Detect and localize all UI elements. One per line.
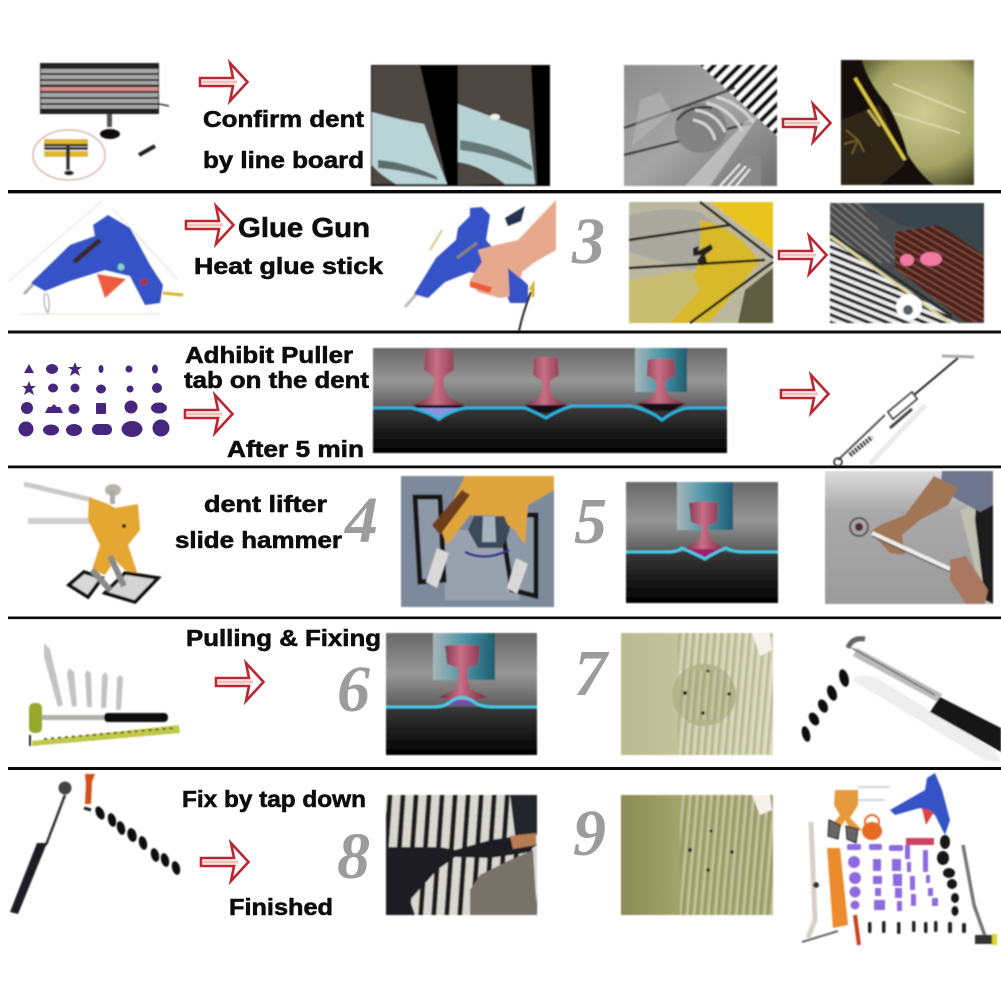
text: after 5 min: After 5 min (227, 436, 364, 462)
chart: dent cross-section with three pullers (373, 348, 727, 453)
text: glue gun heat glue stick (194, 212, 383, 279)
number 3: 3 (571, 205, 605, 278)
text: adhibit puller tab on the dent: Adhibit Puller (185, 342, 353, 368)
text: finished: Finished (229, 894, 333, 920)
text: confirm dent by line board (203, 106, 364, 173)
photo: glue tab on yellow car panel (629, 202, 773, 323)
number 9: 9 (573, 797, 606, 870)
chart: cross-section pulled out (386, 633, 537, 755)
panel: step 1 confirm dent (33, 60, 974, 186)
photo: hands using slide hammer (825, 471, 993, 604)
text: glue gun heat glue stick: Heat glue stick (194, 253, 383, 279)
arrow (201, 843, 248, 881)
panel: step 6 fix by tap down and finished (10, 773, 997, 945)
photo: finished panel (621, 795, 773, 915)
arrow (781, 375, 828, 413)
icon: blue glue gun (8, 201, 183, 314)
photo: pink glue tabs over stripes (830, 203, 984, 323)
arrow (779, 236, 826, 274)
photo: dent lifter on panel (401, 476, 554, 607)
text: dent lifter slide hammer (175, 491, 342, 553)
icon: purple glue tabs (18, 362, 170, 437)
arrow (186, 206, 234, 244)
panel: step 3 adhibit puller tab (18, 342, 974, 466)
icon: complete tool kit (802, 773, 997, 945)
arrow (216, 663, 264, 701)
icon: tap-down hammer with tips (800, 639, 1001, 762)
text: dent lifter slide hammer: slide hammer (175, 527, 342, 553)
chart: cross-section lifting (626, 482, 778, 603)
text: pulling and fixing: Pulling & Fixing (186, 625, 381, 651)
text: adhibit puller tab on the dent (184, 342, 369, 393)
icon: yellow dent lifter (24, 484, 158, 602)
icon: slide hammer (834, 356, 974, 466)
photo: dent under reflection (371, 65, 550, 186)
text: fix by tap down: Fix by tap down (182, 786, 366, 812)
text: glue gun heat glue stick: Glue Gun (238, 212, 370, 243)
icon: line board with stand (33, 63, 169, 180)
icon: hammer and tap-down tips (10, 774, 182, 914)
photo: board reflected on grey door (624, 65, 777, 186)
number 4: 4 (343, 484, 378, 557)
arrow (783, 104, 830, 142)
row dividers (8, 190, 1001, 770)
photo: panel with dots (621, 633, 773, 755)
number 6: 6 (337, 653, 370, 726)
text: adhibit puller tab on the dent: tab on the dent (184, 367, 369, 393)
number 5: 5 (574, 485, 607, 558)
panel: step 2 glue gun (8, 200, 984, 331)
number 7: 7 (574, 637, 610, 710)
photo: hand holding glue gun (405, 200, 556, 331)
text: confirm dent by line board: Confirm dent (203, 106, 364, 132)
photo: tap down over stripes (386, 795, 537, 915)
text: confirm dent by line board: by line board (203, 147, 364, 173)
arrow (200, 63, 248, 101)
number 8: 8 (337, 820, 370, 893)
panel: step 5 pulling and fixing (29, 625, 1001, 762)
text: dent lifter slide hammer: dent lifter (204, 491, 327, 517)
arrow (185, 395, 232, 433)
photo: yellow dent view (841, 60, 974, 185)
icon: tap-down pens, hammer and tape (29, 643, 180, 746)
panel: step 4 dent lifter (24, 471, 993, 607)
